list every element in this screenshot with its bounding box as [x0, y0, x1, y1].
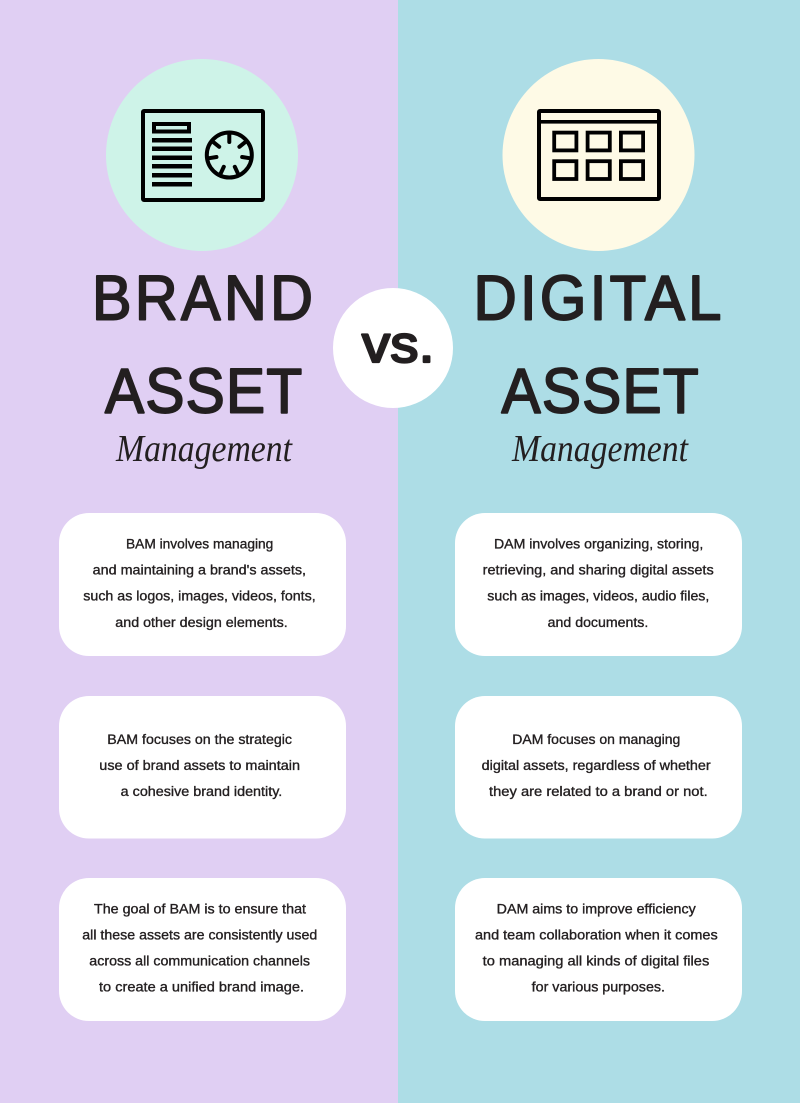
heading: digital asset: ASSET	[502, 356, 699, 426]
card: DAM focus: DAM focuses on managing	[512, 732, 680, 747]
card: BAM goal	[59, 878, 346, 1021]
card: DAM focus	[455, 696, 742, 838]
card: DAM definition	[455, 513, 742, 656]
heading: brand asset: ASSET	[105, 356, 302, 426]
badge: vs.: vs.	[362, 316, 434, 374]
card: DAM definition: and documents.	[548, 615, 648, 630]
card: BAM definition: such as logos, images, videos, fonts,	[83, 588, 316, 604]
card: BAM definition: and maintaining a brand's assets,	[93, 562, 306, 577]
card: BAM definition	[59, 513, 346, 656]
card: DAM focus: digital assets, regardless of whether	[482, 758, 711, 773]
badge: vs.	[333, 288, 453, 408]
subheading: digital management: Management	[511, 428, 689, 470]
card: DAM definition: such as images, videos, audio files,	[487, 588, 709, 604]
card: BAM goal: across all communication channels	[89, 953, 310, 968]
card: BAM goal: The goal of BAM is to ensure that	[94, 901, 306, 916]
card: DAM aim: to managing all kinds of digital files	[483, 953, 710, 968]
panel: digital asset management background	[398, 0, 800, 1103]
panel: brand asset management background	[0, 0, 398, 1103]
card: DAM definition: DAM involves organizing, storing,	[494, 536, 703, 551]
icon: digital asset grid window	[502, 59, 694, 251]
card: BAM focus: use of brand assets to maintain	[99, 758, 300, 773]
card: BAM goal: all these assets are consistently used	[82, 927, 317, 942]
card: BAM goal: to create a unified brand image.	[99, 980, 304, 995]
heading: digital asset	[474, 263, 721, 426]
card: BAM definition: BAM involves managing	[126, 536, 273, 551]
card: DAM aim	[455, 878, 742, 1021]
card: BAM definition: and other design elements.	[115, 615, 288, 630]
heading: brand asset: BRAND	[92, 263, 313, 333]
heading: brand asset	[92, 263, 313, 426]
card: DAM aim: for various purposes.	[532, 980, 665, 995]
card: BAM focus	[59, 696, 346, 838]
icon: brand guidelines document with dial	[106, 59, 298, 251]
card: DAM aim: DAM aims to improve efficiency	[497, 901, 696, 916]
heading: digital asset: DIGITAL	[474, 263, 721, 334]
card: DAM focus: they are related to a brand or not.	[489, 784, 708, 799]
subheading: brand management: Management	[115, 428, 293, 470]
card: DAM aim: and team collaboration when it comes	[475, 927, 718, 942]
card: DAM definition: retrieving, and sharing digital assets	[483, 562, 714, 577]
card: BAM focus: a cohesive brand identity.	[121, 784, 282, 799]
card: BAM focus: BAM focuses on the strategic	[107, 732, 292, 747]
